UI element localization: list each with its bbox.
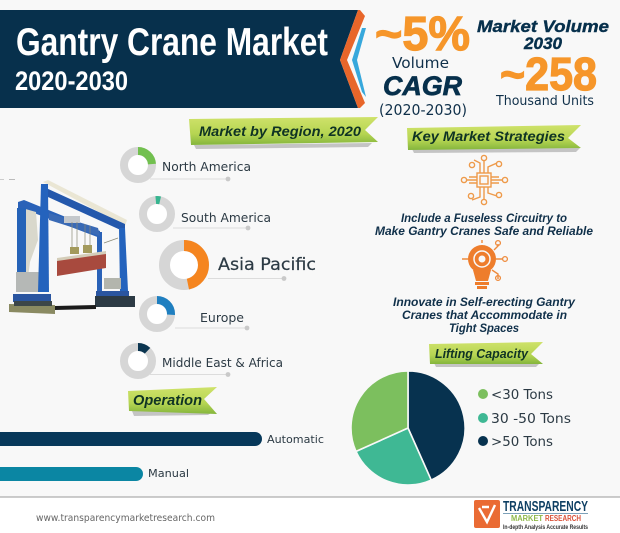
- strategy text 2: Tight Spaces: [449, 321, 519, 335]
- stat: volume CAGR: CAGR: [383, 71, 462, 101]
- donut: europe: [143, 300, 171, 328]
- ribbon: key market strategies: [407, 125, 581, 153]
- ribbon: key market strategies: Key Market Strategies: [412, 128, 565, 144]
- strategy text 1: Include a Fuseless Circuitry to: [401, 211, 567, 225]
- stat: market volume 2030: Market Volume: [477, 17, 609, 36]
- label: north america: North America: [162, 160, 251, 174]
- strategy text 2: [393, 295, 576, 335]
- bar: manual: Manual: [148, 467, 189, 480]
- logo: transparency market research: MARKET: [511, 514, 543, 523]
- legend: lifting capacity: [478, 388, 571, 450]
- label: south america: [173, 211, 271, 230]
- ribbon: market by region: [189, 117, 378, 149]
- strategy text 1: [375, 211, 593, 238]
- donut: north america: [124, 151, 152, 179]
- donut: asia pacific: [164, 246, 204, 284]
- subtitle years: 2020-2030: [15, 66, 128, 96]
- label: europe: Europe: [200, 311, 244, 325]
- bar: manual: [0, 467, 189, 481]
- stat: volume CAGR: Volume: [392, 54, 449, 72]
- stat: market volume 2030: 2030: [523, 34, 563, 53]
- legend: lifting capacity: 30 -50 Tons: [491, 412, 571, 427]
- header banner: [0, 10, 366, 108]
- stat: volume CAGR: (2020-2030): [379, 101, 467, 119]
- title: Gantry Crane Market: [16, 21, 328, 64]
- logo: transparency market research: [474, 498, 588, 531]
- ribbon: lifting capacity: Lifting Capacity: [435, 346, 529, 361]
- bar: automatic: Automatic: [267, 433, 324, 446]
- stat: volume CAGR: ~5%: [375, 8, 470, 61]
- label: north america: [150, 160, 251, 181]
- icon: lightbulb: [462, 240, 507, 289]
- logo: transparency market research: RESEARCH: [545, 514, 581, 523]
- label: asia pacific: [208, 255, 316, 281]
- label: middle east and africa: Middle East & Africa: [162, 356, 283, 370]
- bar: automatic: [0, 432, 324, 446]
- label: europe: [175, 311, 249, 330]
- label: asia pacific: Asia Pacific: [218, 255, 316, 275]
- logo: transparency market research: In-depth Analysis Accurate Results: [503, 524, 588, 531]
- pie chart: lifting capacity: [351, 371, 465, 485]
- stat: market volume 2030: Thousand Units: [495, 94, 594, 109]
- donut: middle east and africa: [124, 347, 152, 375]
- ribbon: market by region: Market by Region, 2020: [199, 123, 361, 139]
- ribbon: lifting capacity: [429, 342, 543, 367]
- donut: south america: [142, 199, 172, 229]
- crane illustration: [9, 180, 135, 314]
- legend: lifting capacity: >50 Tons: [491, 435, 553, 450]
- strategy text 2: Cranes that Accommodate in: [402, 308, 567, 322]
- ribbon: operation: [128, 387, 217, 416]
- icon: circuit chip: [461, 155, 508, 205]
- stat: volume CAGR: [375, 8, 470, 119]
- stat: market volume 2030: [477, 17, 609, 109]
- website url: www.transparencymarketresearch.com: [36, 513, 215, 524]
- strategy text 1: Make Gantry Cranes Safe and Reliable: [375, 224, 593, 238]
- label: south america: South America: [181, 211, 271, 225]
- legend: lifting capacity: <30 Tons: [491, 388, 553, 403]
- ribbon: operation: Operation: [133, 393, 202, 409]
- label: middle east and africa: [150, 356, 283, 377]
- strategy text 2: Innovate in Self-erecting Gantry: [393, 295, 576, 309]
- stat: market volume 2030: ~258: [500, 48, 597, 100]
